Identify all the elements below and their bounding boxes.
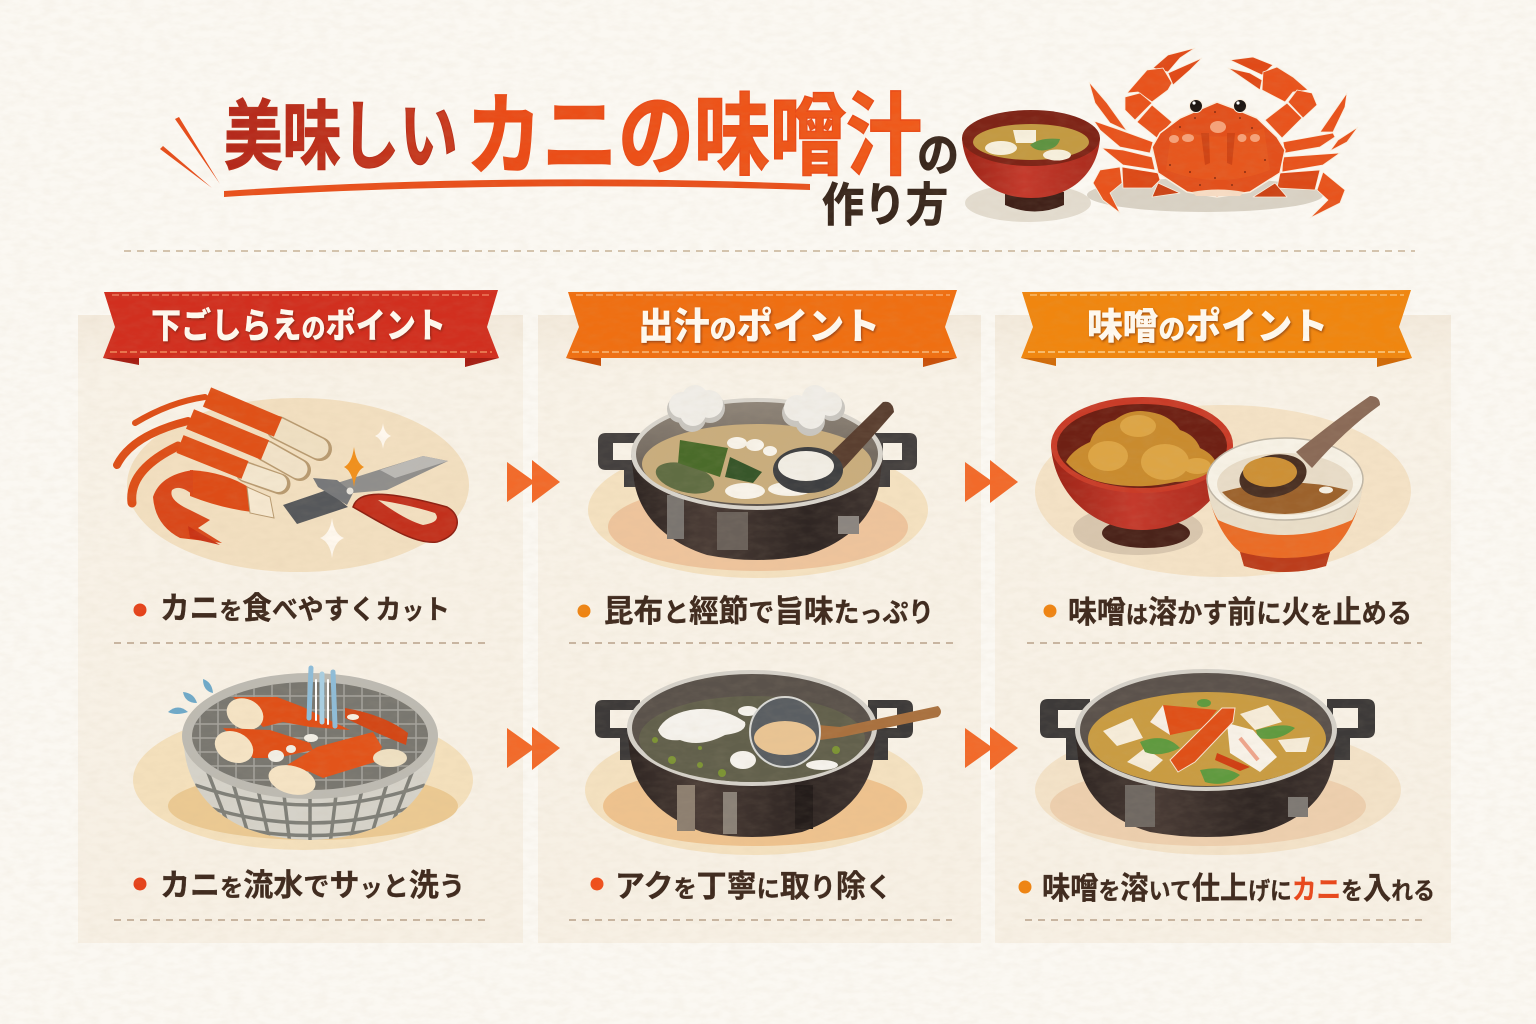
miso mound	[1066, 411, 1217, 486]
seaweed	[652, 457, 718, 499]
illustration: skimming foam from the pot	[585, 670, 941, 855]
bullet	[1018, 880, 1032, 894]
crab shell	[1152, 102, 1285, 197]
title	[160, 87, 959, 231]
crab claw leg	[153, 470, 274, 545]
running water	[309, 668, 335, 726]
caption: カニを食べやすくカット	[160, 591, 450, 626]
bullet	[590, 878, 604, 890]
banner: 出汁のポイント: 出汁のポイント	[638, 306, 880, 347]
shears sheath	[283, 478, 353, 524]
arrow: row 2 left	[507, 727, 560, 770]
crab right limbs	[1228, 57, 1358, 218]
caption: 昆布と經節で旨味たっぷり	[604, 594, 934, 629]
title underline	[224, 179, 810, 197]
caption: 味噌を溶いて仕上げにカニを入れる	[1042, 871, 1435, 906]
red lacquer bowl	[1051, 397, 1233, 548]
crab left limbs	[1089, 48, 1202, 213]
banner: 味噌のポイント: 味噌のポイント	[1087, 306, 1328, 347]
strainer mesh	[190, 680, 430, 795]
pot rim and soup	[631, 398, 883, 510]
caption: アクを丁寧に取り除く	[615, 869, 892, 904]
panel: 下ごしらえのポイント	[78, 290, 523, 943]
water drops	[168, 679, 213, 714]
strainer body	[184, 748, 436, 840]
banner: 味噌のポイント	[1021, 290, 1412, 367]
bullet	[134, 878, 146, 890]
panel: 味噌のポイント	[995, 290, 1451, 943]
ladle	[750, 697, 941, 767]
steam	[667, 385, 845, 436]
green specks	[652, 737, 840, 777]
banner: 下ごしらえのポイント	[103, 290, 499, 367]
crab pieces	[1150, 705, 1277, 772]
tofu pieces	[725, 437, 812, 499]
ladle	[773, 402, 894, 493]
small bowl	[1207, 438, 1363, 572]
panel: 出汁のポイント	[538, 290, 981, 943]
pot handles	[1040, 699, 1375, 760]
bullet	[578, 604, 590, 618]
illustration: finished crab miso soup pot	[1035, 669, 1401, 855]
sparkles	[320, 423, 391, 558]
icon: crab	[1087, 48, 1358, 218]
arrow: row 2 right	[965, 727, 1018, 770]
pot rim and soup	[1075, 669, 1337, 791]
icon: miso soup bowl	[962, 110, 1100, 222]
banner: 出汁のポイント	[566, 290, 957, 367]
shears blade	[337, 456, 448, 493]
title: の: の	[917, 129, 959, 181]
title: 美味しい: 美味しい	[224, 95, 458, 180]
crab legs	[117, 397, 320, 503]
banner: 下ごしらえのポイント: 下ごしらえのポイント	[151, 306, 446, 346]
illustration: miso bowls with spoon	[1035, 396, 1411, 577]
caption: カニを流水でサッと洗う	[160, 868, 465, 903]
pot handles	[595, 700, 913, 760]
bullet	[1044, 604, 1056, 618]
arrow: row 1 right	[965, 460, 1018, 503]
crab eyes	[1190, 100, 1246, 112]
shears handle	[353, 494, 457, 542]
arrow: row 1 left	[507, 460, 560, 503]
pot rim and soup	[627, 670, 877, 786]
title: 作り方: 作り方	[822, 179, 948, 231]
illustration: crab legs and kitchen shears	[117, 397, 469, 572]
greens	[1140, 699, 1295, 784]
illustration: dashi pot with kombu	[588, 385, 928, 578]
bullet	[134, 604, 146, 616]
illustration: crab in a strainer under running water	[133, 668, 473, 850]
caption: 味噌は溶かす前に火を止める	[1068, 595, 1412, 630]
title accent lines	[160, 117, 220, 188]
crab pieces	[210, 692, 408, 800]
pot body	[1075, 730, 1337, 837]
kombu	[678, 440, 762, 483]
pot handles	[598, 433, 917, 487]
tofu	[1103, 705, 1310, 772]
pot body	[631, 454, 883, 560]
spoon	[1235, 396, 1380, 504]
title: カニの味噌汁: カニの味噌汁	[466, 87, 922, 187]
pot body	[627, 728, 877, 837]
foam	[658, 706, 838, 770]
